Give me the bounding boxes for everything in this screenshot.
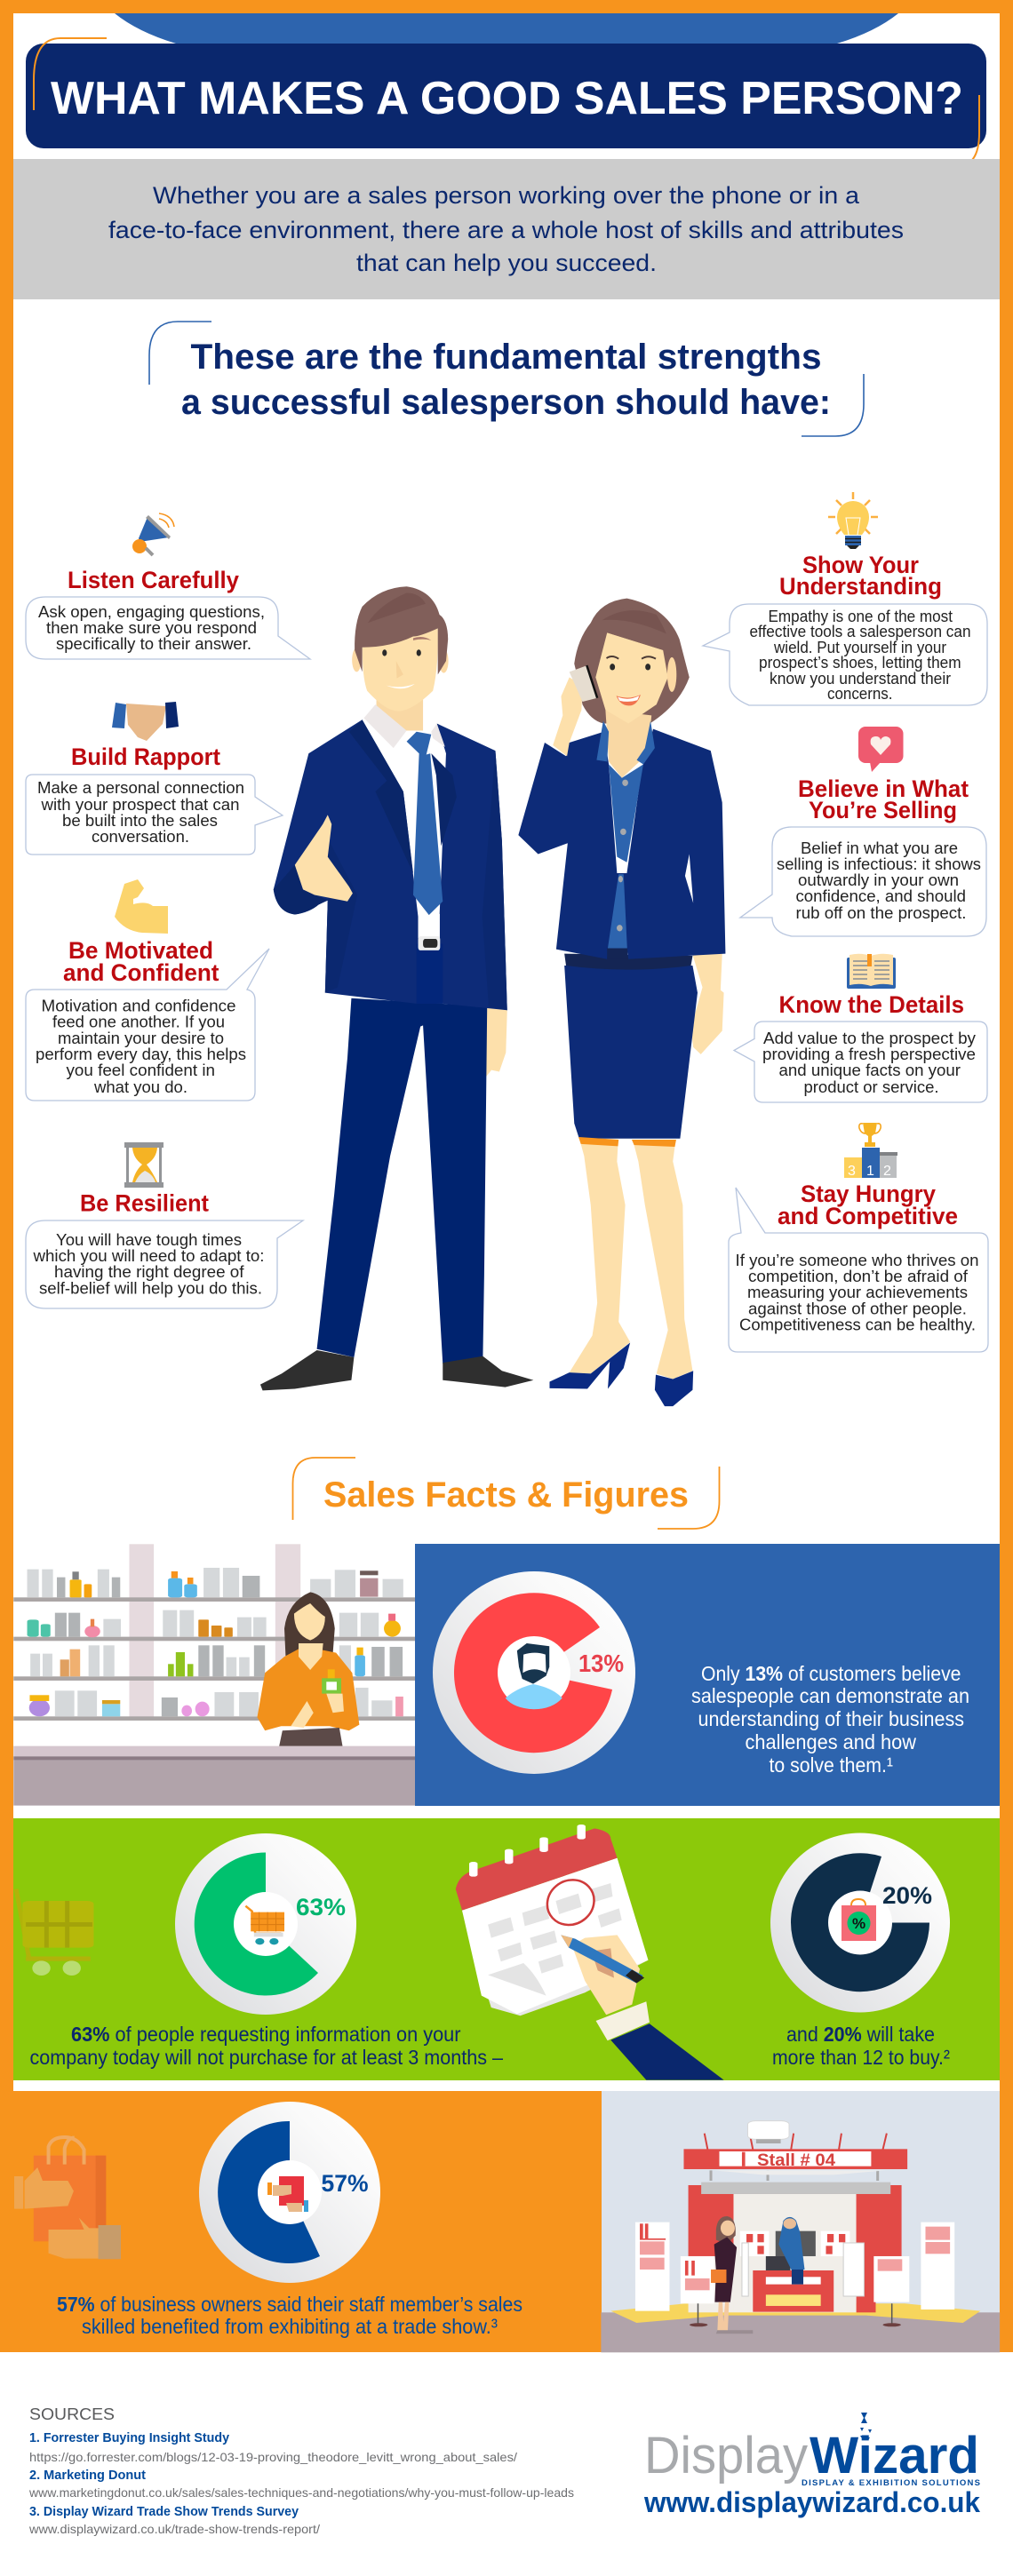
57% text <box>57 2293 522 2338</box>
strength: Believe in What You're Selling <box>740 727 986 936</box>
13% text: to solve them.¹ <box>770 1753 893 1777</box>
strength: Be Motivated and Confident: and Confident <box>63 959 219 986</box>
chart: 63% donut <box>175 1833 356 2015</box>
icon: ghost bag with thumbs <box>14 2137 121 2259</box>
strength: Show Your Understanding: concerns. <box>827 685 892 703</box>
icon: handshake <box>112 702 179 741</box>
13% text: Only 13% of customers believe <box>701 1662 961 1685</box>
strength: Build Rapport <box>26 702 283 855</box>
chart: 20% donut: % <box>852 1915 865 1932</box>
strength: Know the Details: and unique facts on your <box>778 1061 961 1079</box>
57% text: 57% of business owners said their staff member’s sales <box>57 2293 522 2316</box>
strength: Know the Details <box>734 954 987 1102</box>
13% text: understanding of their business <box>698 1707 964 1730</box>
icon: ghost shopping cart <box>16 1889 93 1976</box>
strength: Believe in What You're Selling: You’re Selling <box>809 797 957 823</box>
illustration: perfume shop <box>13 1544 416 1806</box>
strength: Be Motivated and Confident: perform every day, this helps <box>36 1046 246 1063</box>
heading: Sales Facts & Figures <box>293 1458 720 1529</box>
strength: Be Motivated and Confident: Motivation and confidence <box>41 997 236 1014</box>
strength: Show Your Understanding: prospect’s shoes, letting them <box>759 654 961 672</box>
icon: open book <box>847 954 896 989</box>
intro band: face-to-face environment, there are a whole host of skills and attributes <box>108 217 904 243</box>
strength: Be Motivated and Confident: maintain your desire to <box>58 1030 224 1047</box>
20% text: and 20% will take <box>786 2023 935 2046</box>
logo: Display Wizard: Display <box>644 2427 808 2485</box>
strength: Show Your Understanding: effective tools a salesperson can <box>750 623 970 640</box>
strength: Believe in What You're Selling: outwardly in your own <box>798 871 959 889</box>
strength: Be Resilient: having the right degree of <box>54 1263 245 1281</box>
strength: Listen Carefully: Ask open, engaging questions, <box>38 603 265 621</box>
sources <box>28 2405 574 2536</box>
sources: www.marketingdonut.co.uk/sales/sales-techniques-and-negotiations/why-you-must-follow-up-leads <box>28 2485 574 2500</box>
strength: Be Motivated and Confident: what you do. <box>93 1078 187 1096</box>
heading: Sales Facts & Figures: Sales Facts & Figures <box>323 1475 689 1515</box>
icon: trophy podium: 1 <box>866 1164 874 1179</box>
strength: Listen Carefully: then make sure you respond <box>46 619 257 637</box>
sources: SOURCES <box>29 2405 115 2423</box>
strength: Be Resilient: self-belief will help you do this. <box>39 1279 262 1297</box>
panel: 57% stat <box>13 2091 602 2352</box>
strength: Be Resilient: Be Resilient <box>80 1190 209 1217</box>
icon: trophy podium: 3 <box>848 1164 856 1179</box>
sources: 3. Display Wizard Trade Show Trends Survey <box>29 2504 299 2519</box>
strength: Be Resilient <box>26 1142 303 1308</box>
strength: Stay Hungry and Competitive: Competitiveness can be healthy. <box>739 1316 976 1334</box>
chart: 63% donut: 63% <box>296 1894 346 1920</box>
strength: Know the Details: providing a fresh perspective <box>762 1046 976 1063</box>
strength: Believe in What You're Selling: rub off on the prospect. <box>796 904 967 922</box>
illustration: saleswoman on phone <box>518 599 725 1406</box>
strength: Be Motivated and Confident: you feel confident in <box>66 1061 215 1079</box>
panel: trade show stall: Stall # 04 <box>757 2151 835 2170</box>
strength: Listen Carefully: specifically to their answer. <box>56 635 251 653</box>
panel: 13% stat <box>415 1544 1000 1806</box>
strength: Build Rapport: Make a personal connection <box>37 779 244 797</box>
logo: Display Wizard: www.displaywizard.co.uk <box>643 2486 980 2518</box>
strength: Know the Details: Add value to the prospect by <box>763 1030 976 1047</box>
illustration: shop assistant <box>257 1592 359 1746</box>
strength: Listen Carefully <box>26 513 310 659</box>
strength: Stay Hungry and Competitive: Stay Hungry <box>801 1181 936 1207</box>
strength: Show Your Understanding: Show Your <box>802 552 919 578</box>
title: WHAT MAKES A GOOD SALES PERSON? <box>51 73 963 124</box>
strength: Be Resilient: You will have tough times <box>56 1231 242 1249</box>
intro band: that can help you succeed. <box>356 250 657 276</box>
57% text: skilled benefited from exhibiting at a trade show.³ <box>82 2315 498 2338</box>
subheading: fundamental strengths: a successful salesperson should have: <box>181 383 831 422</box>
strength: Believe in What You're Selling: selling is infectious: it shows <box>777 855 981 873</box>
icon: heart speech bubble <box>858 727 903 772</box>
icon: trophy podium <box>844 1123 897 1179</box>
13% text: challenges and how <box>745 1730 916 1753</box>
strength: Stay Hungry and Competitive: If you’re someone who thrives on <box>736 1252 979 1269</box>
strength: Be Motivated and Confident: feed one another. If you <box>52 1013 225 1030</box>
strength: Build Rapport: conversation. <box>92 828 189 846</box>
logo: Display Wizard: Wizard <box>810 2427 979 2485</box>
strength: Show Your Understanding: know you understand their <box>770 670 951 688</box>
panel: trade show stall <box>601 2091 1000 2352</box>
icon: flexed arm <box>115 879 168 934</box>
strength: Be Motivated and Confident <box>26 879 269 1101</box>
strength: Show Your Understanding <box>703 492 987 705</box>
20% text <box>772 2023 950 2069</box>
strength: Believe in What You're Selling: Belief in what you are <box>801 839 958 857</box>
strength: Build Rapport: be built into the sales <box>62 812 218 830</box>
strength: Listen Carefully: Listen Carefully <box>68 567 239 593</box>
strength: Know the Details: product or service. <box>803 1078 938 1096</box>
logo: Display Wizard <box>643 2413 980 2518</box>
strength: Stay Hungry and Competitive: measuring your achievements <box>747 1284 968 1301</box>
strength: Believe in What You're Selling: confidence, and should <box>796 887 966 905</box>
subheading: fundamental strengths <box>149 322 864 436</box>
strength: Build Rapport: Build Rapport <box>71 743 220 770</box>
sources: 2. Marketing Donut <box>29 2468 146 2483</box>
illustration: salesman <box>260 586 533 1390</box>
intro band <box>13 159 1000 299</box>
strength: Be Motivated and Confident: Be Motivated <box>68 937 213 964</box>
strength: Know the Details: Know the Details <box>778 991 964 1018</box>
icon: hourglass <box>124 1142 164 1188</box>
illustration: calendar and writing hand <box>456 1825 724 2080</box>
strength: Show Your Understanding: wield. Put yourself in your <box>773 639 946 656</box>
strength: Stay Hungry and Competitive: competition, don’t be afraid of <box>748 1268 969 1285</box>
strength: Be Resilient: which you will need to adapt to: <box>32 1247 264 1265</box>
13% text <box>691 1662 969 1777</box>
63% text: 63% of people requesting information on your <box>71 2023 461 2046</box>
strength: Stay Hungry and Competitive: against those of other people. <box>748 1300 967 1318</box>
subheading: fundamental strengths: These are the fundamental strengths <box>190 338 821 377</box>
20% text: more than 12 to buy.² <box>772 2046 950 2069</box>
header <box>26 13 986 167</box>
strength: Build Rapport: with your prospect that can <box>40 796 240 814</box>
chart: 13% donut: 13% <box>578 1650 624 1677</box>
logo: Display Wizard: DISPLAY & EXHIBITION SOLUTIONS <box>802 2478 980 2488</box>
strength: Show Your Understanding: Empathy is one of the most <box>768 608 953 625</box>
chart: 13% donut <box>433 1571 635 1774</box>
panel: 63% and 20% stats <box>13 1818 1000 2080</box>
63% text: company today will not purchase for at least 3 months – <box>30 2046 503 2069</box>
chart: 57% donut: 57% <box>322 2170 368 2197</box>
sources: www.displaywizard.co.uk/trade-show-trends-report/ <box>28 2522 320 2536</box>
strength: Believe in What You're Selling: Believe in What <box>798 775 969 802</box>
sources: 1. Forrester Buying Insight Study <box>29 2430 230 2445</box>
illustration: visitor <box>711 2216 753 2334</box>
chart: 57% donut <box>199 2102 380 2283</box>
chart: 20% donut <box>770 1833 950 2013</box>
sources: https://go.forrester.com/blogs/12-03-19-proving_theodore_levitt_wrong_about_sales/ <box>29 2450 517 2464</box>
icon: light bulb <box>828 492 878 549</box>
icon: trophy podium: 2 <box>883 1164 891 1179</box>
13% text: salespeople can demonstrate an <box>691 1684 969 1707</box>
icon: megaphone <box>132 513 174 555</box>
strength: Stay Hungry and Competitive: and Competitive <box>778 1203 958 1229</box>
63% text <box>30 2023 503 2069</box>
strength: Stay Hungry and Competitive <box>729 1123 988 1352</box>
strength: Show Your Understanding: Understanding <box>779 573 942 600</box>
chart: 20% donut: 20% <box>882 1882 932 1909</box>
intro band: Whether you are a sales person working over the phone or in a <box>153 182 860 209</box>
